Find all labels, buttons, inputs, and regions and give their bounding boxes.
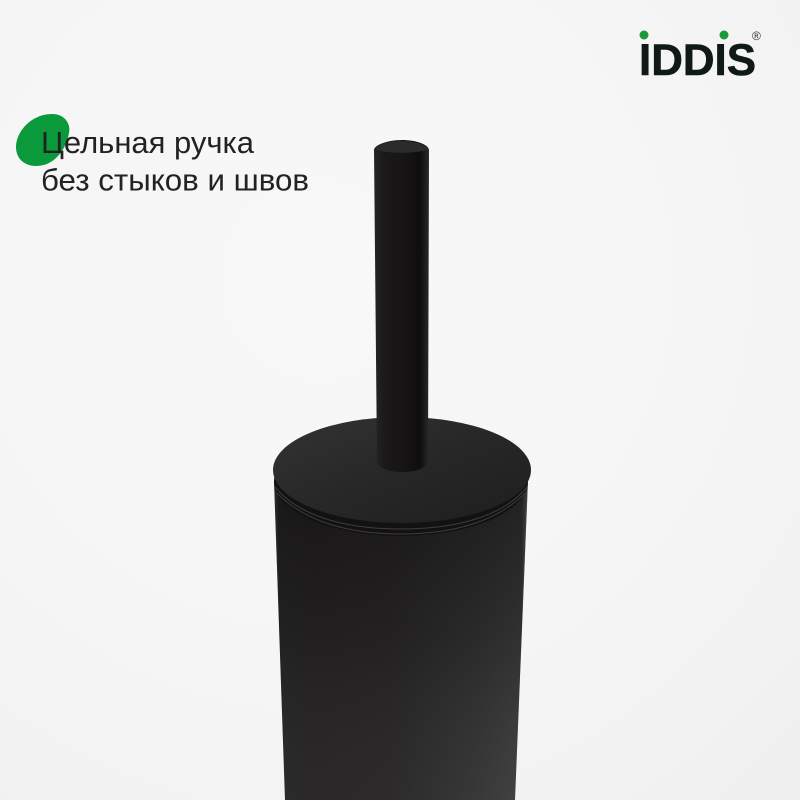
logo: IDDIS: IDDIS <box>639 36 756 85</box>
headline text: без стыков и швов <box>41 164 309 198</box>
headline text: Цельная ручка <box>41 126 254 160</box>
headline text <box>41 126 309 198</box>
container body <box>274 480 528 800</box>
lid with grooves <box>273 417 531 536</box>
product: brush holder <box>273 140 531 800</box>
logo: IDDIS: ® <box>752 29 761 43</box>
handle <box>374 140 429 472</box>
green blob accent <box>16 114 69 166</box>
